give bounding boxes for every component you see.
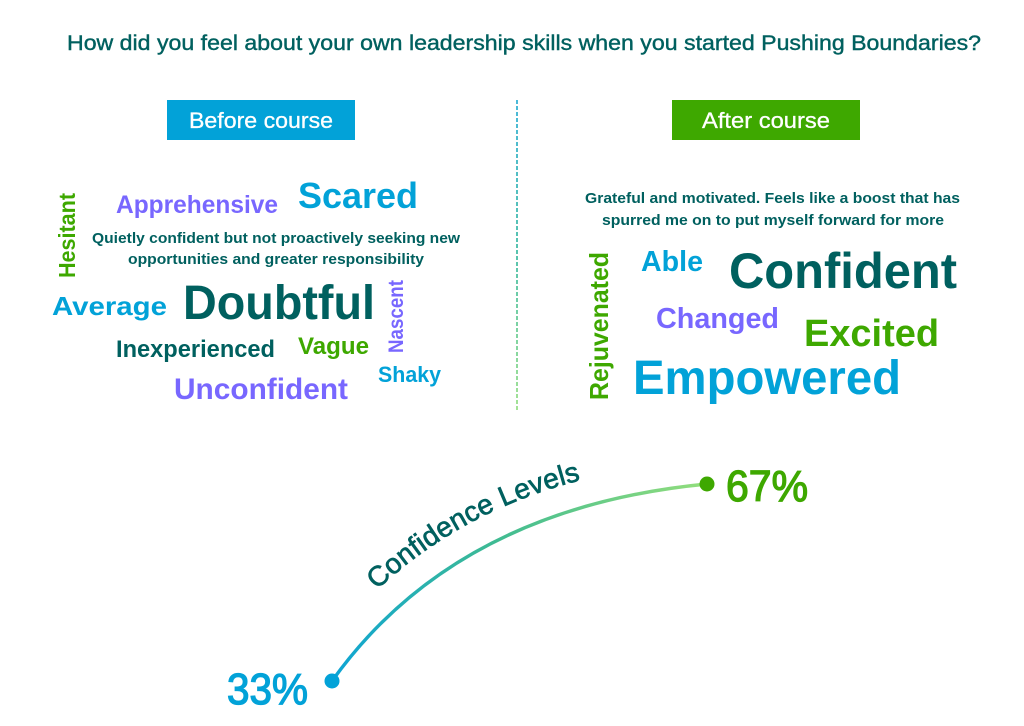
word: Apprehensive: Apprehensive bbox=[116, 191, 278, 219]
panel: before course bbox=[52, 100, 460, 406]
word: Confident: Confident bbox=[729, 243, 957, 299]
title: How did you feel about your own leadership skills when you started Pushing Boundaries? bbox=[67, 32, 981, 55]
word: Changed: Changed bbox=[656, 303, 779, 335]
word: Hesitant: Hesitant bbox=[54, 193, 80, 278]
value: 67%: 67% bbox=[726, 462, 808, 510]
word: Excited: Excited bbox=[804, 313, 939, 355]
quote: quietly confident: Quietly confident but not proactively seeking new bbox=[92, 230, 460, 247]
heading: before course bbox=[167, 100, 355, 140]
word: Empowered: Empowered bbox=[633, 352, 901, 405]
quote: quietly confident bbox=[92, 230, 460, 268]
word: Doubtful: Doubtful bbox=[183, 277, 375, 330]
heading: after course: After course bbox=[702, 108, 830, 133]
curve label: Confidence Levels bbox=[368, 464, 580, 586]
word: Unconfident: Unconfident bbox=[174, 373, 348, 406]
word: Scared: Scared bbox=[298, 175, 418, 216]
end dot bbox=[700, 476, 714, 492]
word: Vague: Vague bbox=[298, 333, 369, 360]
panel: after course bbox=[584, 100, 960, 405]
word: Inexperienced: Inexperienced bbox=[116, 336, 275, 363]
curve line bbox=[332, 484, 707, 681]
word: Shaky: Shaky bbox=[378, 362, 442, 387]
heading: after course bbox=[672, 100, 860, 140]
word: Able: Able bbox=[641, 246, 703, 278]
chart: confidence levels curve bbox=[227, 462, 808, 713]
heading: before course: Before course bbox=[189, 108, 333, 133]
word: Nascent: Nascent bbox=[385, 280, 408, 353]
start dot bbox=[324, 674, 340, 688]
quote: grateful and motivated: Grateful and motivated. Feels like a boost that has bbox=[585, 190, 960, 207]
quote: grateful and motivated: spurred me on to put myself forward for more bbox=[602, 212, 944, 229]
word: Average: Average bbox=[52, 291, 167, 321]
word: Rejuvenated: Rejuvenated bbox=[584, 252, 614, 400]
value: 33%: 33% bbox=[227, 665, 308, 713]
quote: quietly confident: opportunities and greater responsibility bbox=[128, 251, 425, 268]
quote: grateful and motivated bbox=[585, 190, 960, 229]
